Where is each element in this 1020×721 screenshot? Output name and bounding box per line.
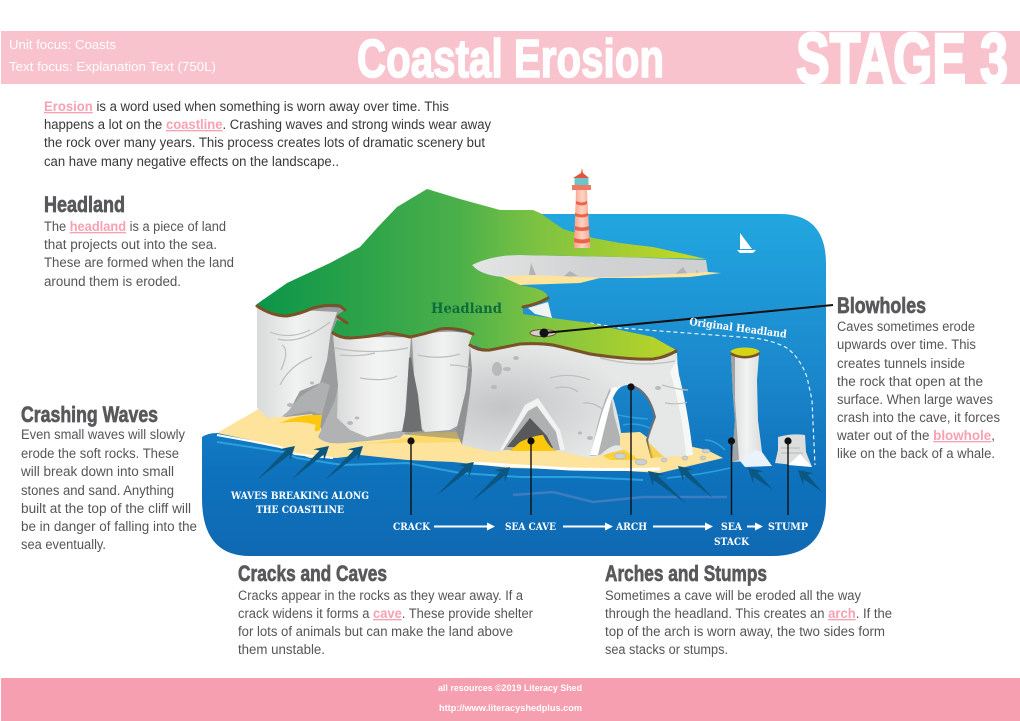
text: blowholes: Caves sometimes erode [837, 319, 975, 334]
left cliff grey base [282, 382, 330, 417]
blowhole pointer [540, 305, 833, 338]
text: arches and stumps: sea stacks or stumps. [605, 642, 728, 657]
text: cracks and caves: crack widens it forms a cave. These provide shelter [238, 606, 534, 621]
third cliff shadow [456, 345, 482, 445]
far headland sand [502, 272, 721, 285]
text: headland: These are formed when the land [44, 255, 234, 270]
far headland cliff [472, 255, 708, 278]
left cliff [257, 306, 337, 418]
heading: cracks and caves: Cracks and Caves [238, 561, 387, 586]
text: crashing waves: be in danger of falling into the [21, 519, 197, 534]
text focus text: Text focus: Explanation Text (750L) [9, 59, 216, 74]
intro text: Erosion is a word used when something is worn away over time. This [44, 99, 449, 114]
sailboat [737, 233, 756, 253]
text: blowholes: the rock that open at the [837, 374, 983, 389]
text: headland [44, 219, 234, 289]
right section of middle cliff [412, 332, 473, 432]
rock stripes [270, 322, 688, 410]
brown soil edges [257, 298, 676, 359]
arch [590, 385, 664, 460]
sequence arrows [434, 522, 763, 530]
arrows: waves [257, 446, 822, 504]
pebble marks [287, 356, 661, 440]
waves breaking label: WAVES BREAKING ALONG [230, 490, 369, 502]
pointer lines [407, 383, 792, 515]
cliff edge highlight [670, 360, 693, 456]
sea [202, 214, 826, 556]
erosion sequence labels: STACK [714, 536, 750, 548]
sand beach [217, 400, 723, 473]
cove white cliff [528, 302, 552, 318]
crack shadow [402, 357, 422, 432]
middle cliff [333, 335, 411, 437]
sea waves and foam [217, 435, 730, 502]
original headland dashed line [590, 323, 815, 465]
text: headland: that projects out into the sea. [44, 237, 217, 252]
text: blowholes: surface. When large waves [837, 392, 993, 407]
title: Coastal Erosion [357, 29, 664, 89]
text: crashing waves: stones and sand. Anything [21, 483, 174, 498]
text: blowholes: creates tunnels inside [837, 356, 965, 371]
heading: crashing waves: Crashing Waves [21, 402, 158, 427]
section: arches and stumps [605, 561, 892, 657]
text: blowholes: crash into the cave, it forces [837, 410, 1000, 425]
text: cracks and caves [238, 588, 534, 657]
text: cracks and caves: Cracks appear in the rocks as they wear away. If a [238, 588, 524, 603]
text: crashing waves [20, 427, 197, 552]
website: http://www.literacyshedplus.com [439, 703, 582, 714]
intro text: happens a lot on the coastline. Crashing waves and strong winds wear away [44, 117, 491, 132]
copyright: all resources ©2019 Literacy Shed [438, 683, 582, 694]
middle cliff grey base [318, 385, 409, 443]
beach pebbles [614, 449, 710, 465]
text: headland: around them is eroded. [44, 274, 181, 289]
section: headland [44, 192, 234, 289]
header band [1, 20, 1020, 99]
footer [1, 678, 1020, 721]
illustration: coastal scene [202, 168, 833, 556]
text: cracks and caves: them unstable. [238, 642, 325, 657]
erosion sequence labels [393, 521, 808, 548]
text: crashing waves: sea eventually. [21, 537, 106, 552]
lighthouse [572, 168, 591, 248]
text: arches and stumps: through the headland. This creates an arch. If the [605, 606, 892, 621]
green land [257, 189, 706, 359]
text: blowholes: upwards over time. This [837, 337, 976, 352]
intro text: the rock over many years. This process creates lots of dramatic scenery but [44, 135, 485, 150]
far headland rocks [529, 263, 701, 277]
text: crashing waves: built at the top of the cliff will [21, 501, 191, 516]
headland main cliff [462, 344, 693, 458]
text: crashing waves: erode the soft rocks. These [21, 446, 179, 461]
heading: arches and stumps: Arches and Stumps [605, 561, 767, 586]
golden sand patches [280, 415, 652, 460]
waves breaking label [230, 490, 369, 516]
blowhole [530, 330, 556, 336]
text: blowholes: water out of the blowhole, [836, 428, 995, 443]
heading: headland: Headland [44, 192, 125, 217]
headland label: Headland [431, 301, 502, 317]
erosion sequence labels: STUMP [768, 521, 808, 533]
text: arches and stumps [605, 588, 892, 657]
cave [500, 398, 565, 451]
intro text [44, 99, 491, 169]
erosion sequence labels: SEA [721, 521, 743, 533]
text: arches and stumps: Sometimes a cave will be eroded all the way [605, 588, 861, 603]
unit focus text: Unit focus: Coasts [9, 37, 116, 52]
text: cracks and caves: for lots of animals but can make the land above [238, 624, 513, 639]
heading: blowholes: Blowholes [837, 293, 926, 318]
sea stump [775, 434, 812, 467]
text: crashing waves: Even small waves will slowly [21, 427, 185, 442]
erosion sequence labels: ARCH [615, 521, 647, 533]
intro text: can have many negative effects on the landscape.. [44, 154, 339, 169]
section: crashing waves [20, 402, 197, 552]
waves breaking label: THE COASTLINE [256, 504, 344, 516]
sea stack [730, 348, 772, 467]
text: arches and stumps: top of the arch is worn away, the two sides form [605, 624, 885, 639]
original headland label: Original Headland [689, 316, 788, 341]
erosion sequence labels: SEA CAVE [505, 521, 556, 533]
text: headland: The headland is a piece of land [44, 219, 226, 234]
text: blowholes: like on the back of a whale. [837, 446, 995, 461]
section: blowholes [836, 293, 1000, 461]
text: blowholes [836, 319, 1000, 461]
erosion sequence labels: CRACK [393, 521, 431, 533]
cliff backing rock [262, 305, 475, 440]
section: cracks and caves [238, 561, 534, 657]
text: crashing waves: will break down into small [20, 464, 174, 479]
